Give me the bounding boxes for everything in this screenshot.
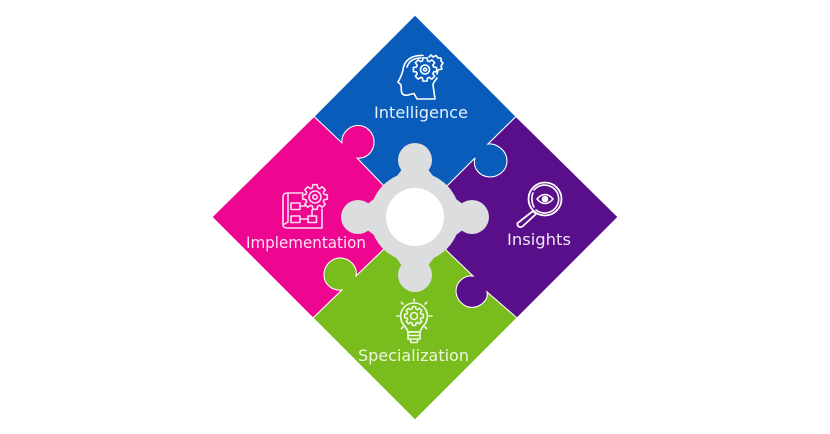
puzzle piece: Insights (purple)	[415, 116, 618, 318]
puzzle piece: Specialization (green)	[313, 217, 517, 420]
icon: head with gears	[398, 55, 443, 99]
label: Specialization: Specialization	[358, 346, 469, 365]
label: Intelligence: Intelligence	[374, 103, 468, 122]
label: Insights: Insights	[507, 230, 571, 249]
label: Implementation: Implementation	[246, 233, 366, 252]
icon: blueprint with gear	[283, 185, 327, 228]
icon: light bulb with gear	[397, 299, 432, 342]
puzzle piece: Intelligence (blue)	[314, 15, 516, 217]
central hub	[341, 143, 489, 292]
puzzle piece: Implementation (pink)	[212, 116, 415, 318]
icon: magnifier with eye	[517, 182, 562, 227]
